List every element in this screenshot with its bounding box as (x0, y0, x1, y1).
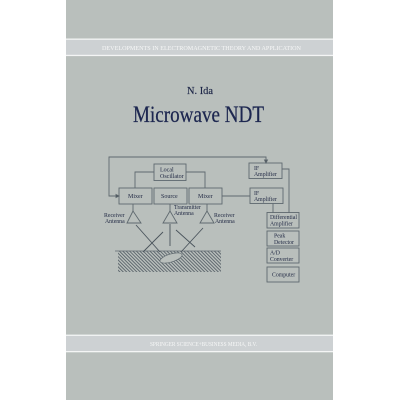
label: transmitter antenna (174, 205, 201, 217)
label: right receiver antenna: Antenna (215, 219, 235, 225)
label: left receiver antenna: Antenna (105, 219, 125, 225)
box: A/D converter (267, 248, 299, 263)
box: IF amplifier upper (249, 163, 282, 178)
defect (159, 251, 183, 265)
box: source (154, 188, 187, 204)
icon: right receiver antenna (200, 211, 214, 223)
top series band (66, 38, 333, 56)
box: peak detector: Detector (274, 240, 294, 246)
label: left receiver antenna (104, 213, 125, 225)
material surface (115, 250, 221, 252)
icon: transmitter antenna (163, 211, 177, 223)
box: right mixer: Mixer (198, 194, 213, 200)
author: N. Ida (187, 85, 213, 97)
label: left receiver antenna: Receiver (104, 213, 125, 219)
box: local oscillator (154, 164, 186, 180)
box: peak detector: Peak (274, 234, 285, 240)
box: A/D converter: Converter (270, 257, 293, 263)
oscillator connections (135, 172, 205, 188)
box: right mixer (189, 188, 222, 204)
box: computer: Computer (272, 272, 295, 278)
hatched material (118, 251, 221, 272)
box: IF amplifier upper: Amplifier (254, 171, 277, 178)
label: right receiver antenna: Receiver (214, 213, 235, 219)
series title: DEVELOPMENTS IN ELECTROMAGNETIC THEORY AND APPLICATION (102, 45, 301, 52)
box: IF amplifier lower: IF (254, 191, 260, 197)
label: transmitter antenna: Antenna (174, 211, 194, 217)
box: IF amplifier lower (250, 188, 283, 204)
box: differential amplifier (267, 212, 299, 228)
box: peak detector (267, 231, 299, 246)
bottom publisher band (66, 335, 333, 352)
microwave rays (136, 224, 203, 252)
title: Microwave NDT (133, 102, 264, 127)
mixer to IF arrow (222, 195, 250, 197)
box: IF amplifier upper: IF (254, 166, 260, 172)
box: IF amplifier lower: Amplifier (254, 196, 277, 203)
box: differential amplifier: Differential (270, 214, 297, 221)
amplifier connections (273, 169, 289, 213)
label: transmitter antenna: Transmitter (174, 205, 201, 211)
box: differential amplifier: Amplifier (270, 220, 293, 228)
label: right receiver antenna (214, 213, 235, 225)
cover background (66, 0, 333, 400)
box: computer (267, 267, 299, 282)
antenna feed lines (133, 204, 207, 211)
box: source: Source (161, 194, 178, 200)
box: local oscillator: Oscillator (160, 174, 184, 180)
box: left mixer (119, 188, 152, 204)
box: local oscillator: Local (160, 168, 174, 174)
feedback line (109, 157, 268, 198)
publisher: SPRINGER SCIENCE+BUSINESS MEDIA, B.V. (150, 341, 257, 348)
box: A/D converter: A/D (270, 250, 280, 256)
box: left mixer: Mixer (128, 194, 143, 200)
icon: left receiver antenna (127, 211, 141, 223)
diagram (104, 157, 299, 282)
